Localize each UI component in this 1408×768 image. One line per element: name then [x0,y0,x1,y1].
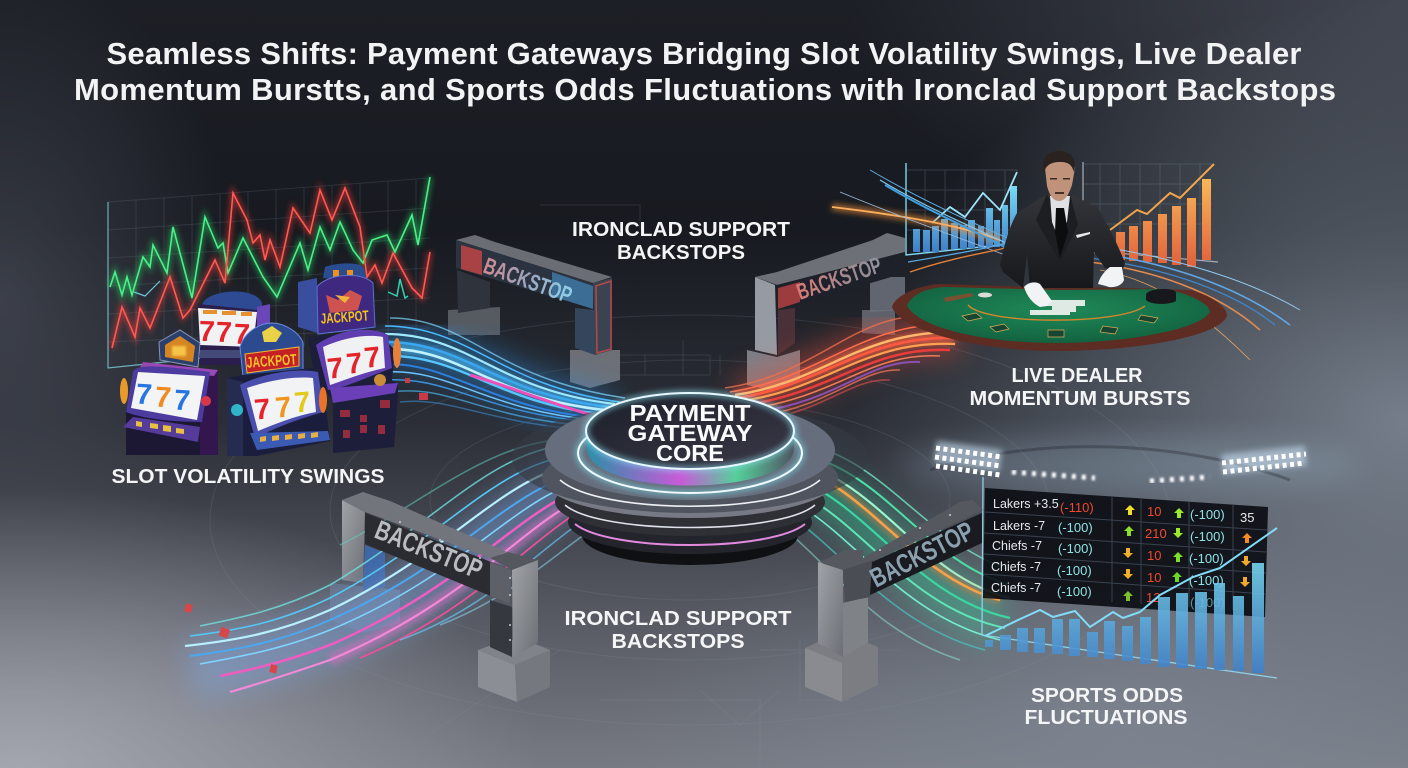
label: payment gateway core: CORE [656,440,724,466]
label: sports odds fluctuations: SPORTS ODDS [1031,685,1183,707]
dealer charts [832,162,1300,360]
label: payment gateway core: GATEWAY [628,420,752,446]
odds table: (-100) [1058,520,1093,535]
live dealer [892,151,1227,351]
label: live dealer momentum bursts: LIVE DEALER [1012,365,1143,387]
label: ironclad support bottom [564,608,792,653]
slot machine: right jackpot: JACKPOT [320,308,369,328]
title [74,36,1336,107]
odds table [983,488,1268,617]
swoosh lines around dealer [832,170,1300,360]
odds table: 35 [1240,510,1254,525]
odds table: 12 [1146,590,1160,605]
label: payment gateway core [628,400,752,466]
gate: top-right backstop [747,233,905,390]
slot machine: front center jackpot [227,323,330,456]
gate: top-left backstop [448,235,620,388]
chart: orange momentum bars [1083,162,1218,267]
flow: bottom-left stream to core [185,439,632,692]
sports odds board [982,477,1277,678]
odds table: (-100) [1057,584,1092,599]
flow: top-left stream to core [385,318,625,430]
label: slot volatility swings: SLOT VOLATILITY SWINGS [112,466,384,488]
label: sports odds fluctuations [1024,685,1188,729]
slot machine: back middle: 7 [198,316,216,348]
title: Seamless Shifts: Payment Gateways Bridging Slot Volatility Swings, Live Dealer [106,36,1302,71]
slot machine: front center jackpot: JACKPOT [246,351,297,372]
odds table: Lakers -7 [993,519,1045,533]
slot machine: front center jackpot: 7 [253,393,272,427]
title: Momentum Burstts, and Sports Odds Fluctuations with Ironclad Support Backstops [74,72,1336,107]
slot machine: right jackpot: 7 [345,347,364,381]
label: backstop bottom-right: BACKSTOP [865,516,979,593]
slot machine: right jackpot: 7 [326,352,345,386]
label: payment gateway core: PAYMENT [630,400,750,426]
gate: bottom-right backstop [805,500,983,702]
slot machine: right jackpot [298,263,401,453]
label: live dealer momentum bursts [970,365,1190,410]
label: backstop bottom-left: BACKSTOP [371,515,487,585]
label: ironclad support top: IRONCLAD SUPPORT [572,219,790,241]
slot machine: front center jackpot: 7 [274,391,293,425]
platform glowing disc [578,393,802,493]
slot machine: back middle: 7 [215,317,233,349]
odds table: Chiefs -7 [992,539,1042,553]
label: backstop top-left: BACKSTOP [480,252,576,308]
slot machines [120,263,401,456]
slot machine: back middle [198,291,270,365]
odds table: (-100) [1057,563,1092,578]
odds table: 10 [1147,548,1161,563]
label: backstop top-right: BACKSTOP [793,251,885,305]
odds table: Lakers +3.5 [993,497,1059,511]
odds table: 10 [1147,504,1161,519]
sports stadium lights [900,437,1360,493]
gate: bottom-left backstop [342,492,550,702]
slot machine: back middle: 7 [233,319,251,351]
slot machine: front left: 7 [173,384,191,417]
dealer suit [1000,194,1125,288]
odds table: 10 [1147,570,1161,585]
chart: blue momentum bars [906,163,1018,255]
odds table: Chiefs -7 [991,581,1041,595]
flow: top-right stream to core [725,316,960,421]
label: ironclad support top [572,219,790,264]
dealer head [1043,151,1075,201]
platform steps [512,400,868,565]
odds bar chart [982,477,1277,678]
slot machine: right jackpot: 7 [363,341,382,375]
chart: slot volatility lines [108,177,430,368]
odds table: (-100) [1190,507,1225,522]
label: live dealer momentum bursts: MOMENTUM BURSTS [970,388,1190,410]
label: ironclad support top: BACKSTOPS [617,242,745,264]
label: ironclad support bottom: BACKSTOPS [612,631,744,653]
odds table: (-100) [1058,541,1093,556]
odds table: Chiefs -7 [991,560,1041,574]
gate post: bottom-left [330,500,400,633]
slot machine: front center jackpot: 7 [293,386,312,420]
label: ironclad support bottom: IRONCLAD SUPPORT [564,608,792,630]
payment gateway core platform [512,393,868,565]
dealer table [892,284,1227,351]
odds table: 210 [1145,526,1167,541]
slot machine: front left: 7 [135,378,153,411]
particles: data squares [184,378,428,674]
slot machine: front left [120,330,218,455]
label: sports odds fluctuations: FLUCTUATIONS [1024,707,1188,729]
odds table: (-100) [1189,551,1224,566]
odds table: (-100) [1190,595,1225,610]
dealer gloves [1024,267,1124,307]
odds table: (-100) [1190,529,1225,544]
odds table: (-100) [1189,573,1224,588]
slot machine: front left: 7 [154,381,172,415]
odds arrows [1123,505,1252,601]
flow: bottom-right stream to core [745,442,1010,660]
odds table: (-110) [1060,500,1094,515]
